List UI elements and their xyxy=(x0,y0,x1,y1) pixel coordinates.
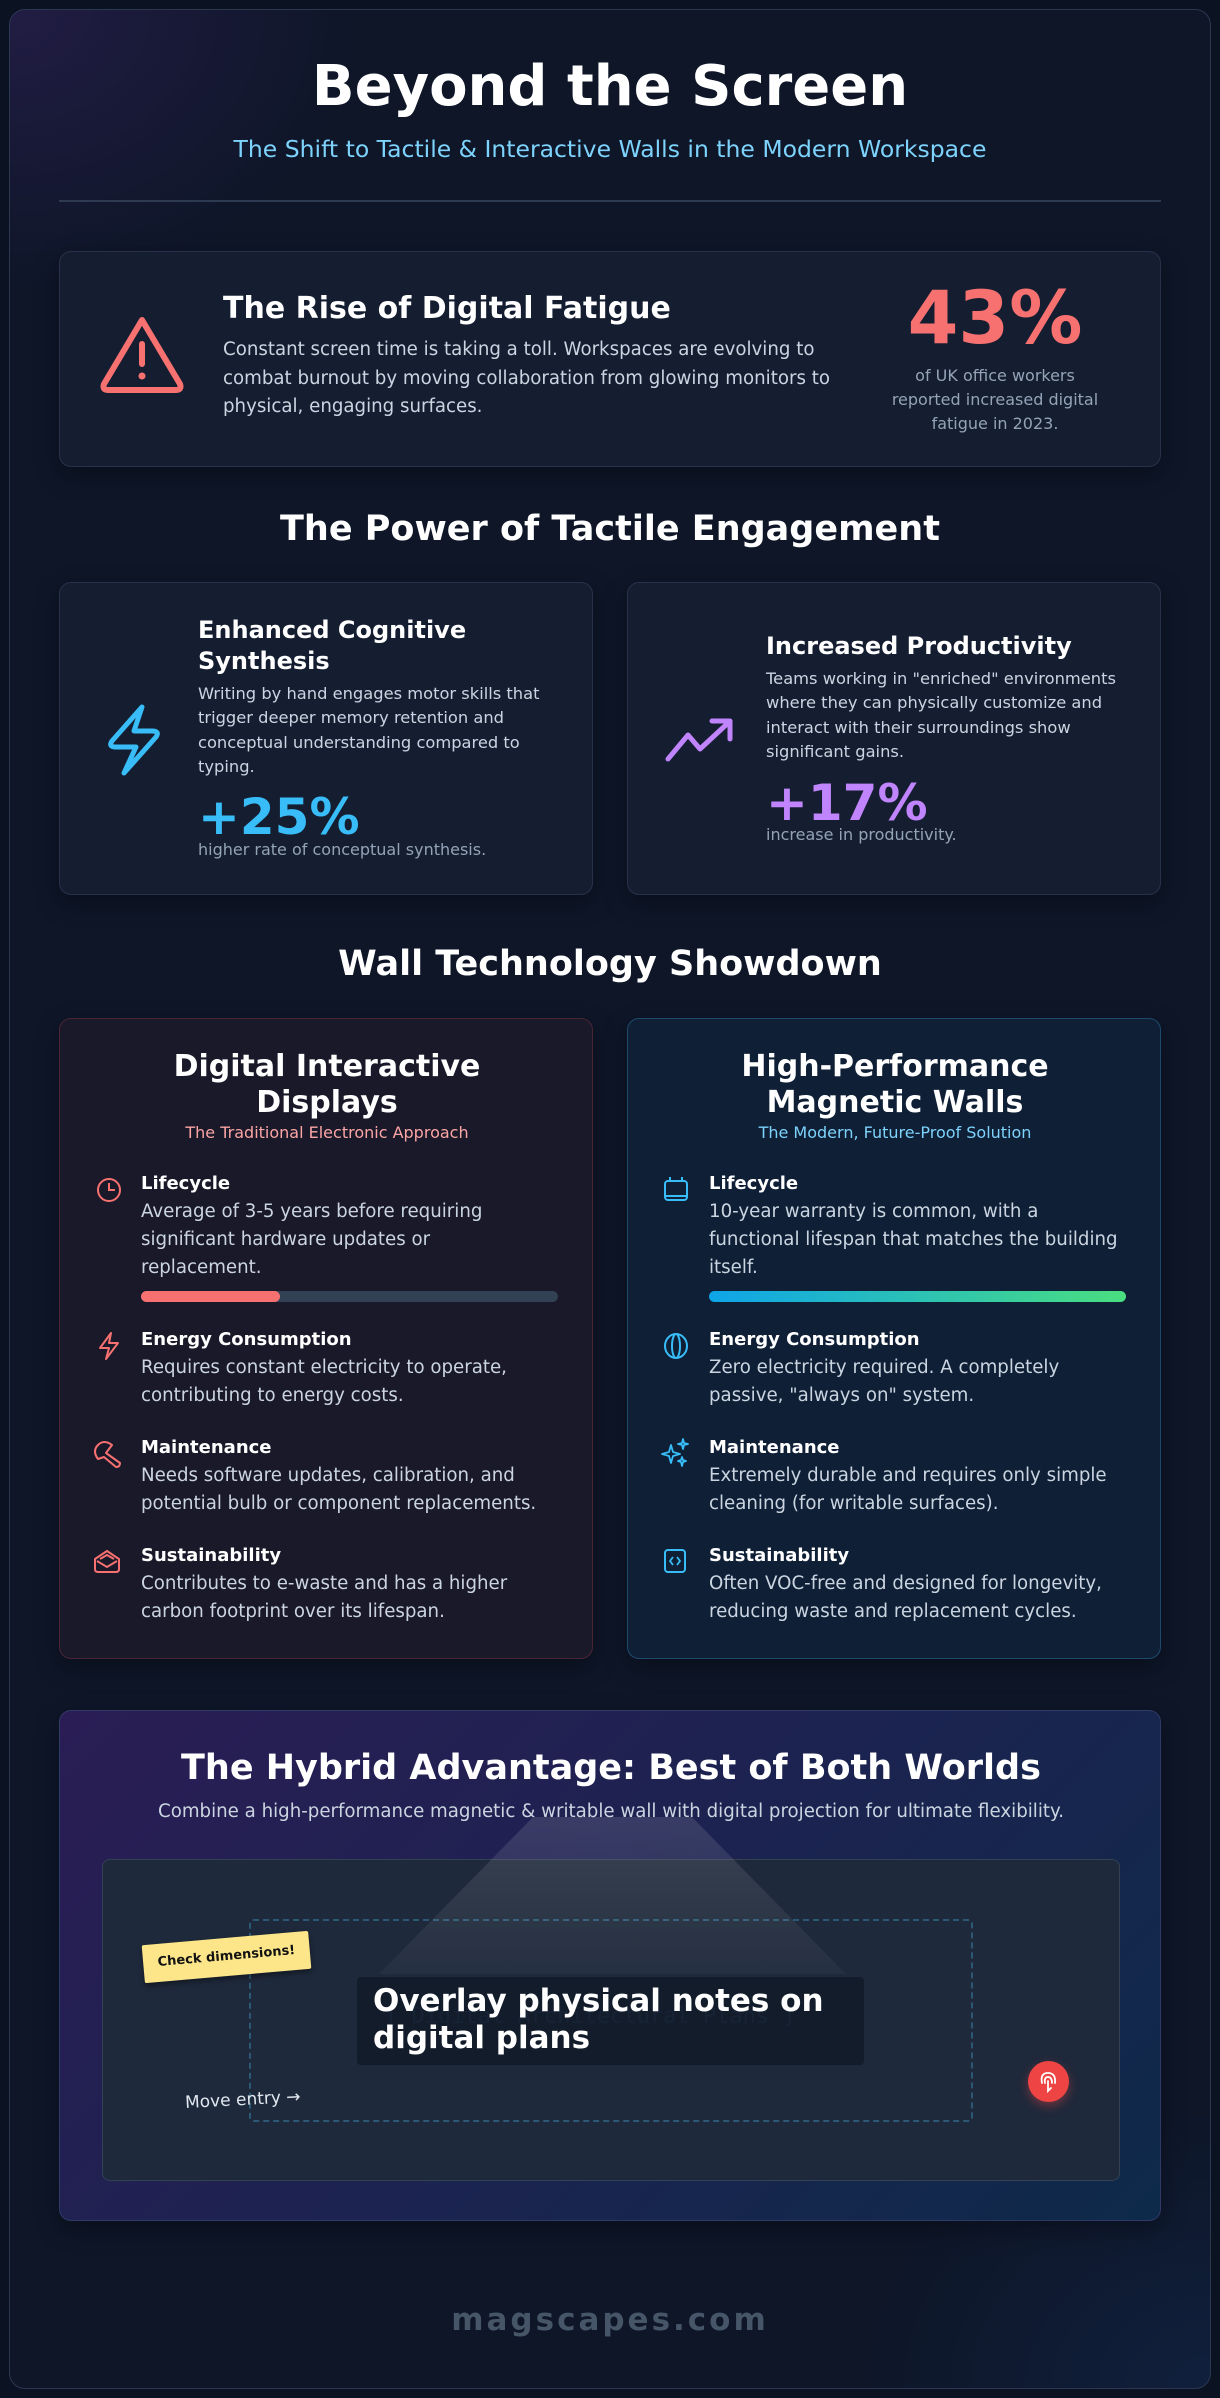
item: sustainability: Contributes to e-waste and has a higher carbon footprint over its lifespan. xyxy=(141,1573,507,1622)
icon: touch button xyxy=(1028,2061,1069,2102)
item: energy: Energy Consumption xyxy=(709,1329,920,1350)
item: energy xyxy=(99,1329,507,1406)
heading: Digital Interactive xyxy=(174,1049,480,1084)
sticky note: Check dimensions! xyxy=(157,1943,296,1970)
label: move entry: Move entry → xyxy=(185,2087,301,2113)
heading: showdown: Wall Technology Showdown xyxy=(338,944,882,984)
heading xyxy=(741,1049,1049,1120)
text block: Teams working in "enriched" environments where they can physically customize and interact with their surroundings show significant gains. xyxy=(766,669,1116,761)
heading: Displays xyxy=(256,1085,398,1120)
overlay text box: Overlay physical notes on digital plans xyxy=(373,1983,824,2056)
heading xyxy=(174,1049,480,1120)
item: energy: Zero electricity required. A completely passive, "always on" system. xyxy=(709,1357,1059,1406)
item: lifecycle: Average of 3-5 years before requiring significant hardware updates or replacement. xyxy=(141,1201,482,1278)
text block: Constant screen time is taking a toll. Workspaces are evolving to combat burnout by moving collaboration from glowing monitors to physical, engaging surfaces. xyxy=(223,339,830,417)
heading: Enhanced Cognitive Synthesis xyxy=(198,616,466,675)
panel: productivity: increase in productivity. xyxy=(766,825,957,844)
panel: digital displays: The Traditional Electronic Approach xyxy=(185,1123,469,1142)
sticky note xyxy=(142,1931,311,1983)
item: energy: Energy Consumption xyxy=(141,1329,352,1350)
stat: 43% xyxy=(892,276,1098,433)
title: Beyond the Screen xyxy=(312,54,908,119)
item: sustainability: Sustainability xyxy=(141,1545,281,1566)
item: sustainability: Sustainability xyxy=(709,1545,849,1566)
item: lifecycle xyxy=(664,1173,1126,1302)
item: maintenance xyxy=(661,1437,1107,1514)
heading: tactile engagement: The Power of Tactile Engagement xyxy=(280,509,940,549)
item: maintenance: Maintenance xyxy=(709,1437,840,1458)
item: energy: Requires constant electricity to operate, contributing to energy costs. xyxy=(141,1357,507,1406)
panel: digital fatigue xyxy=(59,251,1161,467)
panel: hybrid advantage xyxy=(59,1710,1161,2221)
heading: Magnetic Walls xyxy=(767,1085,1023,1120)
stat: +25%: +25% xyxy=(198,788,360,846)
subtitle: The Shift to Tactile & Interactive Walls in the Modern Workspace xyxy=(234,135,986,163)
plan label: [ Digital Architectural Plans ] xyxy=(385,2004,796,2029)
footer: magscapes.com xyxy=(451,2302,769,2338)
panel: magnetic walls xyxy=(627,1018,1161,1659)
item: maintenance: Needs software updates, calibration, and potential bulb or component replacements. xyxy=(141,1465,536,1514)
item: sustainability xyxy=(94,1545,508,1622)
text block: Writing by hand engages motor skills that trigger deeper memory retention and conceptual understanding compared to typing. xyxy=(198,684,540,776)
icon: trend arrow xyxy=(666,718,732,762)
subtitle: Combine a high-performance magnetic & writable wall with digital projection for ultimate flexibility. xyxy=(158,1801,1064,1822)
item: lifecycle: Lifecycle xyxy=(141,1173,230,1194)
item: sustainability: Often VOC-free and designed for longevity, reducing waste and replacement cycles. xyxy=(709,1573,1102,1622)
item: maintenance: Extremely durable and requires only simple cleaning (for writable surfaces). xyxy=(709,1465,1107,1514)
heading: The Hybrid Advantage: Best of Both Worlds xyxy=(181,1748,1041,1788)
icon: warning xyxy=(100,317,184,393)
panel: digital displays xyxy=(59,1018,593,1659)
stat: 43%: 43% xyxy=(908,276,1082,361)
item: lifecycle xyxy=(97,1173,558,1302)
stat: +17%: +17% xyxy=(766,774,928,832)
icon: lightning xyxy=(108,704,160,776)
illustration: wall mockup xyxy=(102,1859,1120,2181)
item: maintenance: Maintenance xyxy=(141,1437,272,1458)
dashed plan area xyxy=(249,1919,973,2122)
panel: cognitive synthesis: higher rate of conceptual synthesis. xyxy=(198,840,486,859)
item: energy xyxy=(664,1329,1059,1406)
heading: Increased Productivity xyxy=(766,632,1072,660)
item: lifecycle: 10-year warranty is common, with a functional lifespan that matches the building itself. xyxy=(709,1201,1118,1278)
stat: 43%: of UK office workers reported increased digital fatigue in 2023. xyxy=(892,366,1098,433)
item: maintenance xyxy=(94,1437,536,1514)
projector beam xyxy=(391,1817,834,1963)
item: sustainability xyxy=(664,1545,1102,1622)
heading: High-Performance xyxy=(741,1049,1049,1084)
panel: productivity xyxy=(627,582,1161,895)
panel: magnetic walls: The Modern, Future-Proof Solution xyxy=(759,1123,1031,1142)
item: lifecycle: Lifecycle xyxy=(709,1173,798,1194)
panel: cognitive synthesis xyxy=(59,582,593,895)
heading: The Rise of Digital Fatigue xyxy=(223,291,671,326)
